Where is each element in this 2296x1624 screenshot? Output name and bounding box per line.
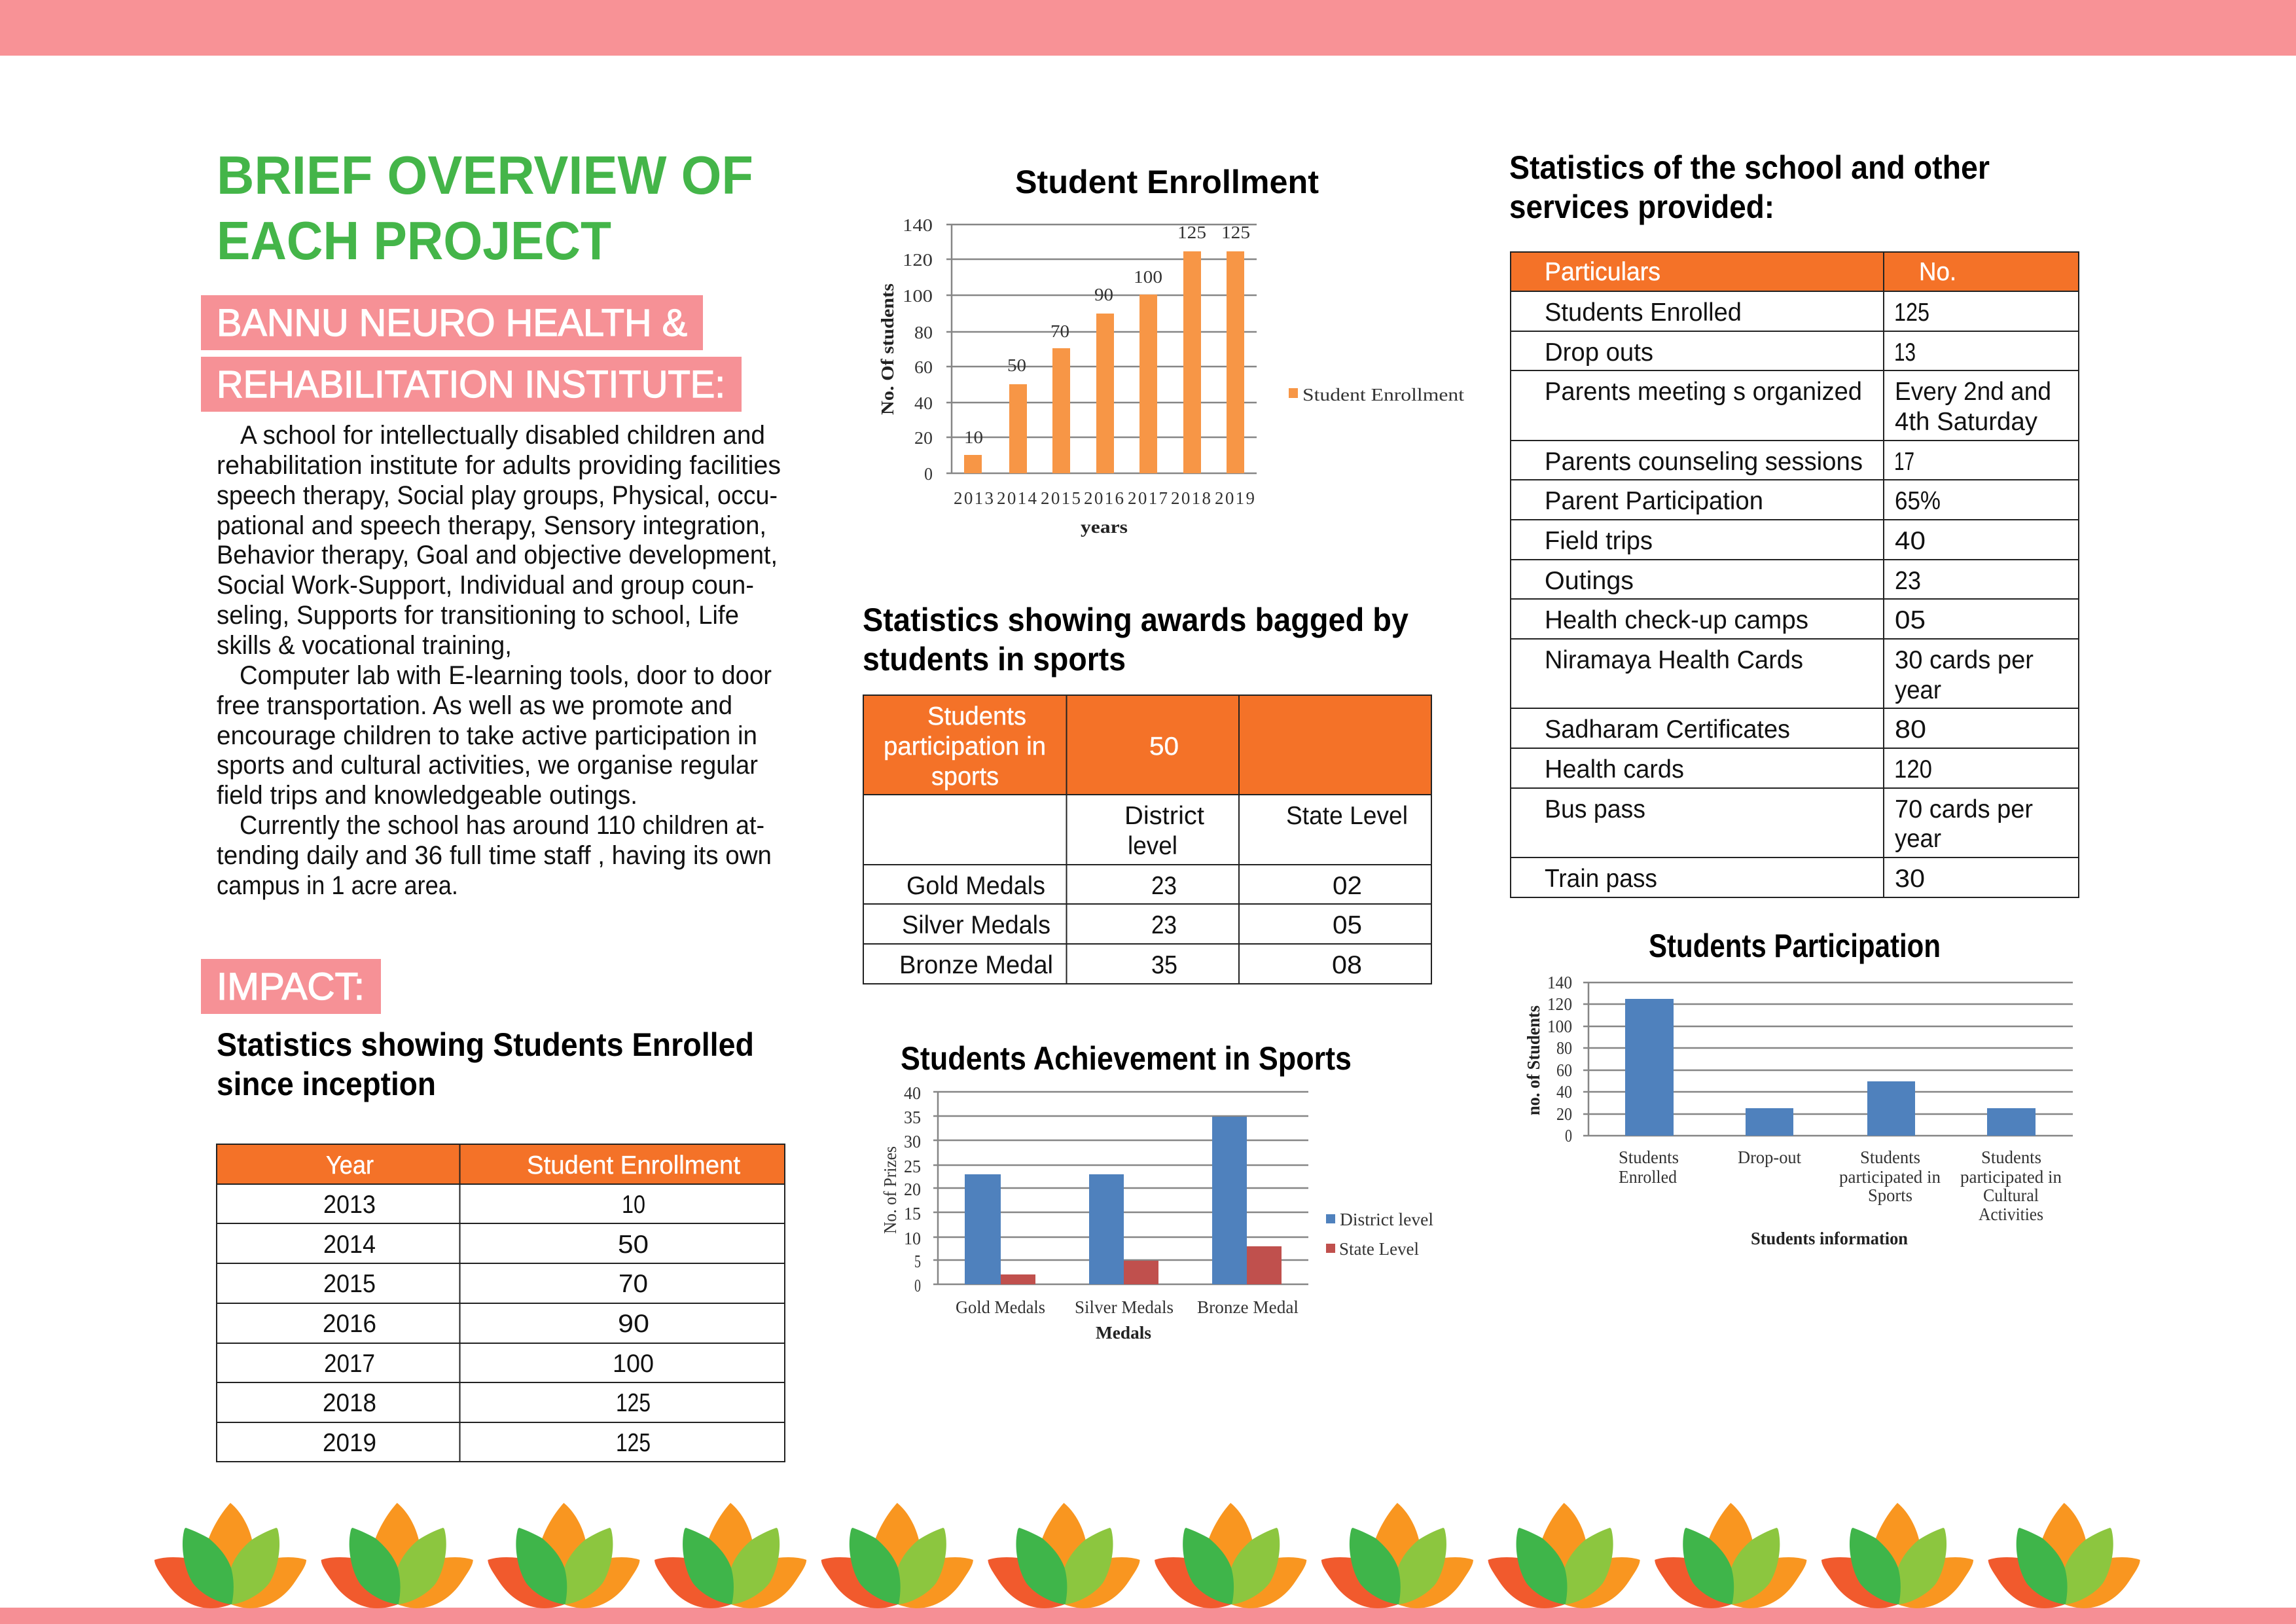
particulars column: Train pass <box>1545 865 1657 893</box>
text block: project description: seling, Supports for transitioning to school, Life <box>217 601 739 630</box>
text block: project description: sports and cultural activities, we organise regular <box>217 751 758 780</box>
x axis title: Students information <box>1751 1229 1908 1248</box>
y axis labels <box>903 215 933 484</box>
particulars column: Parent Participation <box>1545 487 1763 515</box>
x axis labels: 2017 <box>1128 488 1168 508</box>
y axis labels: 140 <box>903 215 933 235</box>
chart title: Students Participation <box>1649 928 1941 964</box>
x axis title: Medals <box>1096 1323 1151 1343</box>
number column: year <box>1895 825 1941 853</box>
chart: students participation <box>1524 928 2073 1248</box>
x axis labels: 2018 <box>1171 488 1211 508</box>
text block: project description: campus in 1 acre area. <box>217 871 458 900</box>
chart: students achievement in sports <box>880 1040 1433 1343</box>
number column: 30 <box>1895 865 1925 893</box>
lotus row <box>154 1503 2140 1608</box>
number column: 65% <box>1895 487 1941 515</box>
title: BRIEF OVERVIEW OF <box>217 145 753 206</box>
icon: lotus 4 <box>655 1503 806 1608</box>
y axis labels: 60 <box>1556 1060 1572 1080</box>
icon: lotus 5 <box>821 1503 973 1608</box>
table rows: 10 <box>622 1191 645 1219</box>
data labels: 125 <box>1221 223 1250 242</box>
y axis labels: 20 <box>914 428 933 448</box>
y axis labels: 120 <box>1547 994 1572 1014</box>
number column: 30 cards per <box>1895 646 2034 674</box>
y axis labels: 35 <box>904 1108 921 1127</box>
table rows: 2018 <box>323 1389 376 1417</box>
number column: 40 <box>1895 527 1926 555</box>
y axis labels <box>1547 973 1572 1146</box>
table rows: 2016 <box>323 1310 376 1338</box>
table body: 23 <box>1151 911 1177 939</box>
text block: project description: Currently the school has around 110 children at- <box>240 811 764 840</box>
icon: lotus 12 <box>1988 1503 2140 1608</box>
y axis labels: 0 <box>914 1276 921 1295</box>
text block: project description: pational and speech therapy, Sensory integration, <box>217 511 766 540</box>
bars <box>1625 999 2036 1136</box>
table rows: 2015 <box>323 1270 376 1298</box>
heading: students enrolled statistics: Statistics showing Students Enrolled <box>217 1026 754 1063</box>
table rows: 125 <box>616 1429 651 1457</box>
table header row: No. <box>1919 258 1956 286</box>
table body: 02 <box>1333 872 1362 900</box>
data labels: 125 <box>1177 223 1206 242</box>
icon: lotus 1 <box>154 1503 306 1608</box>
y axis title: No. Of students <box>878 283 897 415</box>
table header row <box>217 1144 785 1184</box>
y axis labels: 20 <box>1556 1104 1572 1124</box>
table rows: 125 <box>616 1389 651 1417</box>
text block: project description: Social Work-Support, Individual and group coun- <box>217 571 754 600</box>
icon: lotus 11 <box>1821 1503 1973 1608</box>
x axis labels: Sports <box>1868 1185 1912 1205</box>
y axis labels: 80 <box>1556 1038 1572 1058</box>
heading: school statistics: services provided: <box>1509 189 1774 225</box>
heading: students enrolled statistics <box>217 1026 754 1102</box>
data labels: 70 <box>1050 321 1069 341</box>
y axis labels: 140 <box>1547 973 1572 992</box>
y axis labels: 60 <box>914 357 933 377</box>
text block: project description: rehabilitation institute for adults providing facilities <box>217 451 781 480</box>
table rows: 2017 <box>324 1350 375 1378</box>
chart: student enrollment bar chart <box>878 164 1465 537</box>
table rows: 90 <box>618 1310 649 1338</box>
heading: awards statistics: Statistics showing awards bagged by <box>863 602 1408 638</box>
text block: project description: A school for intellectually disabled children and <box>240 421 765 450</box>
data labels: 10 <box>964 427 983 447</box>
x axis labels: participated in <box>1839 1167 1941 1187</box>
heading: institute name banner: REHABILITATION INSTITUTE: <box>217 363 725 406</box>
state level bars <box>1001 1246 1282 1284</box>
heading: awards statistics <box>863 602 1408 677</box>
text block: project description: encourage children to take active participation in <box>217 721 757 750</box>
heading: students enrolled statistics: since inception <box>217 1066 436 1102</box>
particulars column: Outings <box>1545 567 1634 595</box>
table header row: sports <box>931 763 999 791</box>
particulars column: Health cards <box>1545 755 1684 784</box>
particulars column: Drop outs <box>1545 338 1653 367</box>
heading: institute name banner <box>201 295 742 412</box>
y axis labels: 15 <box>904 1204 921 1223</box>
y axis labels: 40 <box>904 1083 921 1103</box>
table: school statistics <box>1511 252 2079 897</box>
number column: 17 <box>1894 448 1914 476</box>
text block: project description: speech therapy, Social play groups, Physical, occu- <box>217 481 778 510</box>
x axis labels: 2015 <box>1041 488 1081 508</box>
district level bars <box>965 1117 1247 1284</box>
y axis labels: 20 <box>904 1180 921 1199</box>
y axis labels: 0 <box>924 464 933 484</box>
x axis labels: Students <box>1860 1147 1920 1167</box>
y axis labels <box>904 1083 921 1295</box>
text block: project description: skills & vocational training, <box>217 631 512 660</box>
x axis labels: Bronze Medal <box>1197 1297 1299 1317</box>
table body: State Level <box>1286 802 1408 830</box>
table body: District <box>1124 802 1204 830</box>
number column <box>1894 298 2051 893</box>
number column: 23 <box>1895 567 1921 595</box>
x axis labels: 2016 <box>1084 488 1124 508</box>
x axis labels: participated in <box>1960 1167 2062 1187</box>
table body: Bronze Medal <box>899 951 1053 979</box>
text block: project description: field trips and knowledgeable outings. <box>217 781 637 810</box>
table header row: Students <box>927 702 1026 731</box>
icon: lotus 8 <box>1321 1503 1473 1608</box>
text block: project description: tending daily and 36 full time staff , having its own <box>217 841 772 870</box>
y axis labels: 10 <box>904 1229 921 1248</box>
y axis labels: 30 <box>904 1132 921 1151</box>
number column: 125 <box>1894 298 1929 327</box>
table body: Silver Medals <box>902 911 1050 939</box>
heading: awards statistics: students in sports <box>863 641 1126 677</box>
text block: project description: free transportation. As well as we promote and <box>217 691 732 720</box>
top band <box>0 0 2296 56</box>
table body: 05 <box>1333 911 1362 939</box>
x axis labels: Drop-out <box>1738 1147 1801 1167</box>
number column: 80 <box>1895 715 1926 744</box>
legend: Student Enrollment <box>1302 385 1465 405</box>
x axis labels: 2019 <box>1215 488 1255 508</box>
x axis title: years <box>1081 517 1128 537</box>
y axis labels: 100 <box>903 286 933 306</box>
x axis labels: Students <box>1619 1147 1679 1167</box>
particulars column: Students Enrolled <box>1545 298 1742 327</box>
particulars column: Health check-up camps <box>1545 606 1808 634</box>
table header row <box>1511 252 2079 291</box>
legend: District level <box>1340 1210 1433 1229</box>
icon: lotus 6 <box>988 1503 1140 1608</box>
particulars column: Parents meeting s organized <box>1545 378 1862 406</box>
icon: lotus 3 <box>488 1503 639 1608</box>
y axis labels: 40 <box>1556 1082 1572 1102</box>
number column: 05 <box>1895 606 1926 634</box>
text block: project description: Behavior therapy, Goal and objective development, <box>217 541 778 569</box>
y axis labels: 100 <box>1547 1017 1572 1036</box>
number column: 13 <box>1894 338 1916 367</box>
table header row: participation in <box>884 732 1046 761</box>
x axis labels <box>954 488 1255 508</box>
y axis labels: 80 <box>914 323 933 342</box>
title <box>217 145 753 271</box>
y axis labels: 25 <box>904 1157 921 1176</box>
chart title: Students Achievement in Sports <box>901 1040 1352 1077</box>
table rows: 100 <box>613 1350 654 1378</box>
x axis labels: Gold Medals <box>956 1297 1045 1317</box>
bars <box>964 251 1244 473</box>
x axis labels: Cultural <box>1983 1185 2039 1205</box>
title: EACH PROJECT <box>217 210 611 271</box>
x axis labels <box>1619 1147 2062 1224</box>
heading: impact banner: IMPACT: <box>217 965 365 1008</box>
text block: project description <box>217 421 781 900</box>
chart title: Student Enrollment <box>1015 164 1319 200</box>
particulars column: Field trips <box>1545 527 1653 555</box>
number column: 4th Saturday <box>1895 408 2037 436</box>
table header row <box>863 695 1431 795</box>
table: student enrollment by year <box>217 1144 785 1462</box>
table rows: 2014 <box>323 1231 376 1259</box>
heading: institute name banner: BANNU NEURO HEALTH & <box>217 302 687 344</box>
x axis labels: 2014 <box>997 488 1037 508</box>
icon: lotus 2 <box>321 1503 473 1608</box>
legend <box>1326 1210 1433 1259</box>
bottom band <box>0 1608 2296 1624</box>
legend: State Level <box>1339 1239 1419 1259</box>
number column: year <box>1895 676 1941 704</box>
number column: Every 2nd and <box>1895 378 2051 406</box>
x axis labels: 2013 <box>954 488 994 508</box>
icon: lotus 9 <box>1488 1503 1640 1608</box>
particulars column: Niramaya Health Cards <box>1545 646 1803 674</box>
x axis labels: Students <box>1981 1147 2041 1167</box>
data labels: 100 <box>1134 267 1162 287</box>
table body: level <box>1128 832 1177 860</box>
x axis labels: Activities <box>1979 1204 2043 1224</box>
x axis labels: Enrolled <box>1619 1167 1677 1187</box>
y axis title: No. of Prizes <box>880 1146 900 1234</box>
y axis title: no. of Students <box>1524 1005 1543 1115</box>
particulars column <box>1545 298 1863 893</box>
table body: 35 <box>1151 951 1177 979</box>
heading: school statistics <box>1509 149 1990 225</box>
table rows <box>323 1191 654 1457</box>
table rows: 2013 <box>323 1191 376 1219</box>
x axis labels: Silver Medals <box>1075 1297 1174 1317</box>
particulars column: Bus pass <box>1545 795 1645 823</box>
data labels: 50 <box>1007 355 1026 375</box>
data labels: 90 <box>1094 285 1113 304</box>
table body <box>899 802 1408 979</box>
table body: Gold Medals <box>906 872 1045 900</box>
icon: lotus 10 <box>1655 1503 1806 1608</box>
icon: lotus 7 <box>1155 1503 1306 1608</box>
x axis labels <box>956 1297 1299 1317</box>
table header row: Particulars <box>1545 258 1660 286</box>
table rows: 50 <box>618 1231 649 1259</box>
table body: 08 <box>1332 951 1362 979</box>
table rows: 2019 <box>323 1429 376 1457</box>
particulars column: Parents counseling sessions <box>1545 448 1863 476</box>
table body: 23 <box>1151 872 1177 900</box>
table rows: 70 <box>619 1270 648 1298</box>
number column: 70 cards per <box>1895 795 2033 823</box>
y axis labels: 0 <box>1565 1126 1572 1146</box>
data labels <box>964 223 1250 447</box>
heading: school statistics: Statistics of the school and other <box>1509 149 1990 186</box>
y axis labels: 40 <box>914 393 933 413</box>
text block: project description: Computer lab with E-learning tools, door to door <box>240 661 772 690</box>
number column: 120 <box>1894 755 1932 784</box>
particulars column: Sadharam Certificates <box>1545 715 1790 744</box>
table header row: 50 <box>1149 732 1179 761</box>
table: sports medals <box>863 695 1431 984</box>
y axis labels: 5 <box>914 1252 921 1271</box>
table header row: Year <box>326 1151 374 1180</box>
heading: impact banner <box>201 959 381 1014</box>
y axis labels: 120 <box>903 250 933 270</box>
table header row: Student Enrollment <box>527 1151 740 1180</box>
